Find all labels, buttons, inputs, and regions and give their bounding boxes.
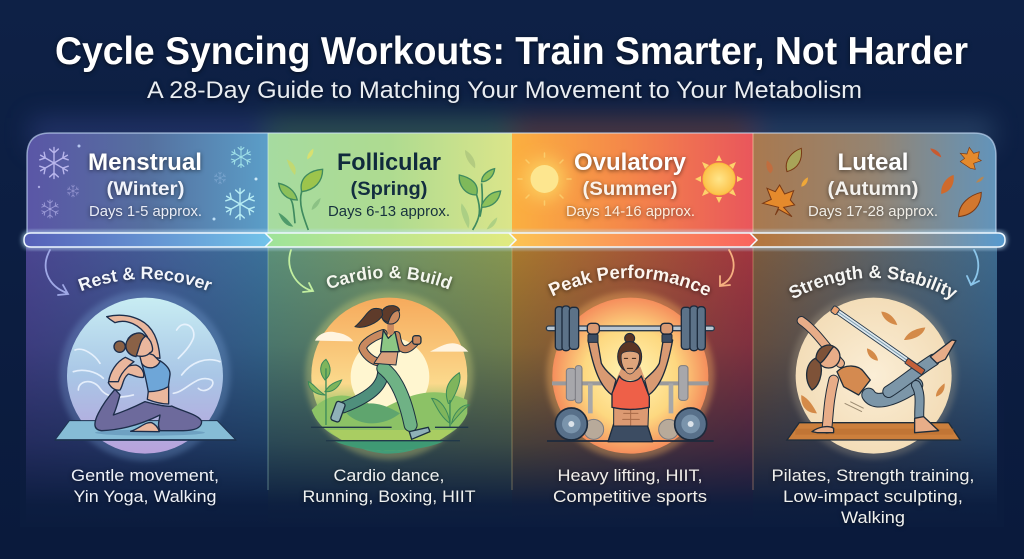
season: (Spring) [350,178,428,200]
text: luteal workouts: Walking [841,508,905,527]
text: menstrual workouts [71,466,219,506]
arrow: peak [720,250,734,286]
icon: autumn leaves [763,147,984,217]
heading: Ovulatory [574,149,687,176]
text: follicular workouts: Cardio dance, [334,466,444,485]
timeline bar [24,233,1005,247]
text: luteal workouts: Low-impact sculpting, [783,487,963,506]
panel: luteal header [763,147,984,220]
arrow: strength [967,250,979,285]
days: Days 6-13 approx. [328,204,450,220]
arrow: rest [46,250,68,295]
text: luteal workouts [772,466,974,527]
panel: ovulatory header [518,149,743,220]
icon: sprouts [278,149,501,230]
panel: header band [27,133,996,235]
text: ovulatory workouts [553,466,707,506]
text: ovulatory workouts: Competitive sports [553,487,707,506]
illustration: pilates [787,292,960,459]
days: Days 14-16 approx. [566,204,695,220]
season: (Autumn) [828,178,918,200]
heading: Follicular [337,149,441,176]
icon: snowflakes [38,144,257,220]
heading: Menstrual [88,149,202,176]
text: ovulatory workouts: Heavy lifting, HIIT, [558,466,702,485]
curved heading: peak performance: Peak Performance [546,264,712,298]
text: menstrual workouts: Yin Yoga, Walking [74,487,216,506]
panel: follicular header [278,149,501,230]
text: luteal workouts: Pilates, Strength training, [772,466,974,485]
heading: Luteal [838,149,908,176]
arrow: cardio [289,250,313,292]
text: follicular workouts: Running, Boxing, HIIT [302,487,476,506]
panel: menstrual header [38,144,257,220]
season: (Summer) [582,178,678,200]
text: follicular workouts [302,466,476,506]
illustration: yoga [55,290,236,461]
curved heading: strength and stability: Strength & Stability [788,265,958,302]
curved heading: cardio and build: Cardio & Build [324,265,454,292]
icon: faint sun [518,153,571,205]
illustration: runner [305,292,473,460]
icon: bright sun [695,155,743,203]
season: (Winter) [106,178,184,200]
subtitle: A 28-Day Guide to Matching Your Movement to Your Metabolism [147,77,862,104]
curved heading: rest and recover: Rest & Recover [76,265,213,294]
text: menstrual workouts: Gentle movement, [71,466,219,485]
illustration: weightlifter [546,292,714,460]
header glow [30,118,993,148]
panel: lower column backgrounds [20,240,1004,527]
title: Cycle Syncing Workouts: Train Smarter, Not Harder [55,30,968,73]
days: Days 1-5 approx. [89,204,202,220]
days: Days 17-28 approx. [808,204,938,220]
